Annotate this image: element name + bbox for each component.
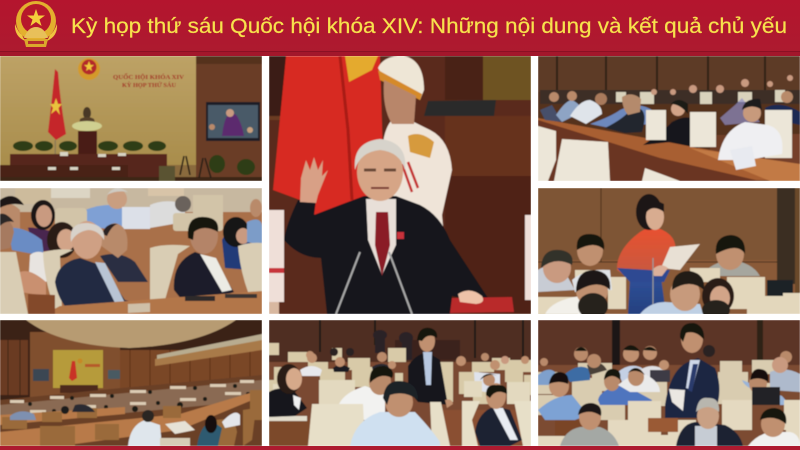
- wall text: [113, 73, 184, 89]
- monitor: [424, 100, 496, 116]
- panel: delegates at desks, right top: [538, 56, 800, 181]
- back row delegates: [300, 348, 529, 395]
- desk surface: [538, 118, 768, 181]
- man front left: [560, 403, 619, 446]
- foreground delegates: [10, 404, 240, 446]
- white guard at left and right edges: [269, 210, 531, 314]
- balcony: [155, 334, 262, 366]
- seats upper: [54, 196, 224, 232]
- flag: [48, 69, 66, 154]
- panel: leaders seated: [0, 188, 262, 314]
- microphones: [336, 252, 412, 314]
- back row delegates: [540, 75, 800, 164]
- standing delegate: [665, 323, 719, 418]
- right leader: [174, 217, 234, 302]
- brown seat backs: [2, 390, 262, 446]
- honour guard: [377, 56, 453, 227]
- tv cameras: [180, 156, 211, 178]
- woman delegate: [617, 194, 700, 314]
- laptops and seated row: [538, 368, 790, 420]
- icon: national emblem: [15, 1, 57, 47]
- front desk: [45, 291, 262, 314]
- speaker suit: [284, 196, 488, 314]
- big man front: [350, 381, 440, 446]
- standing delegate: [408, 328, 453, 408]
- panel: delegate speaking, bottom right: [538, 320, 800, 446]
- seated man top left: [572, 234, 612, 292]
- panel: delegate standing in hall: [269, 320, 531, 446]
- row of seated delegates: [540, 91, 800, 148]
- bust and podium: [72, 107, 102, 156]
- rostrum desks: [0, 152, 262, 181]
- wall text: QUỐC HỘI KHÓA XIV: [113, 73, 184, 81]
- ceiling dome: [26, 320, 236, 348]
- suited man right: [475, 383, 522, 446]
- front seats: [308, 401, 531, 446]
- back row delegates: [538, 345, 800, 392]
- white seats: [538, 110, 792, 181]
- cream seats, back rows: [269, 343, 531, 404]
- left leader: [55, 221, 148, 312]
- stage backdrop: [33, 350, 120, 393]
- women and side delegates: [0, 196, 262, 296]
- seats: [538, 268, 800, 317]
- constitution book and hand: [450, 290, 514, 313]
- bottom red bar: [0, 446, 800, 450]
- desks: [0, 390, 262, 446]
- front seat strip: [630, 435, 668, 446]
- middle row seats: [273, 380, 530, 405]
- raised hand: [300, 157, 328, 203]
- cream seats back: [538, 360, 780, 420]
- wood wall and screen: [196, 56, 262, 181]
- seated man right: [708, 234, 760, 277]
- desks and seats front: [269, 410, 525, 446]
- cream seats mid front: [538, 400, 800, 446]
- title: Kỳ họp thứ sáu Quốc hội khóa XIV: Những nội dung và kết quả chủ yếu: [71, 15, 787, 38]
- man front right: [748, 408, 800, 446]
- seated man left: [538, 250, 575, 292]
- wall text: KỲ HỌP THỨ SÁU: [122, 81, 177, 89]
- walls: [0, 332, 262, 402]
- crowd floor: [0, 375, 262, 446]
- panel: woman delegate speaking: [538, 188, 800, 320]
- man in white shirt: [339, 366, 393, 420]
- header banner: [0, 0, 800, 56]
- man front center: [676, 398, 743, 446]
- flag behind speaker: [273, 56, 384, 230]
- panel: full chamber overview: [0, 320, 262, 446]
- front delegates: [545, 270, 734, 320]
- laptop right: [767, 280, 793, 298]
- seats mid: [0, 243, 262, 314]
- panel: party chief taking oath: [269, 56, 531, 314]
- camera operators: [373, 330, 413, 360]
- plants: [13, 141, 255, 175]
- panel: chamber podium photo: [0, 56, 262, 181]
- desk strip: [555, 420, 585, 436]
- delegate in white shirt: [718, 99, 782, 170]
- upper row delegates: [50, 188, 192, 230]
- speaker head: [355, 139, 405, 201]
- woman left: [269, 364, 307, 417]
- emblem on wall: [78, 58, 100, 80]
